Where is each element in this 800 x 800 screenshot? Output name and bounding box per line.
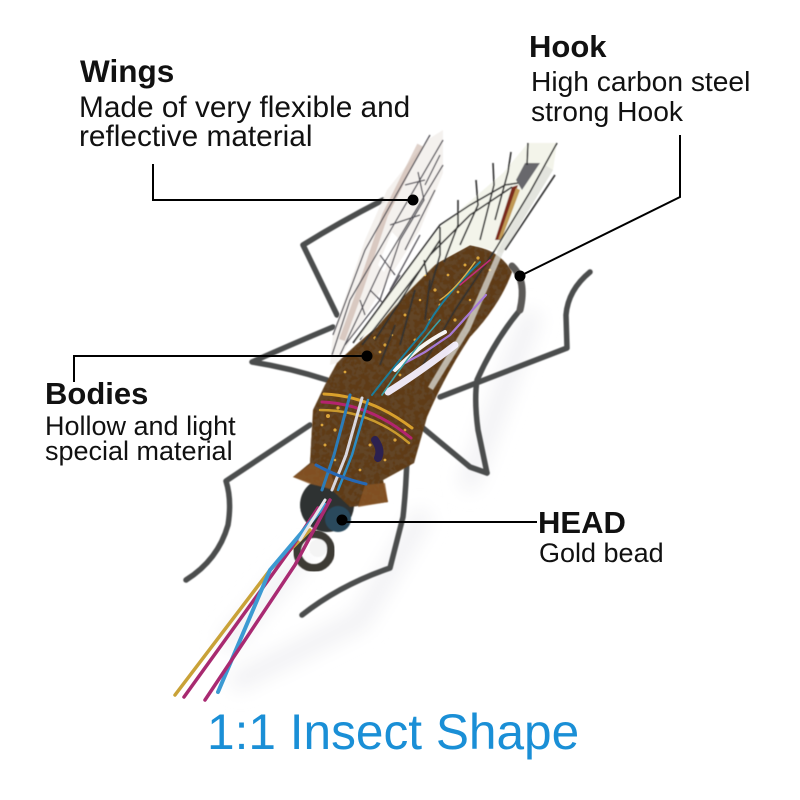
thread wraps bbox=[316, 394, 412, 490]
hook eye bbox=[297, 534, 331, 568]
wings description: reflective material bbox=[79, 120, 312, 153]
glitter specks bbox=[321, 256, 491, 471]
legs bbox=[186, 200, 590, 615]
bodies heading: Bodies bbox=[45, 376, 148, 411]
hook heading: Hook bbox=[529, 29, 607, 64]
bodies description: Hollow and light bbox=[45, 411, 236, 441]
bodies description: special material bbox=[45, 436, 233, 466]
callout: bodies bbox=[45, 350, 372, 466]
wings leader line bbox=[153, 164, 418, 206]
head description: Gold bead bbox=[539, 538, 664, 568]
head leader line bbox=[336, 514, 537, 526]
callout: wings bbox=[79, 53, 418, 206]
tail fibres bbox=[175, 500, 330, 700]
hook description: strong Hook bbox=[531, 95, 684, 127]
callout: hook bbox=[514, 29, 750, 282]
abdomen and thorax bbox=[293, 245, 512, 507]
head heading: HEAD bbox=[538, 505, 626, 540]
callout: head bbox=[336, 505, 664, 568]
head bead bbox=[300, 478, 354, 532]
wings heading: Wings bbox=[80, 53, 174, 89]
bodies leader line bbox=[74, 350, 372, 382]
right wing bbox=[353, 143, 557, 390]
title: 1:1 Insect Shape bbox=[207, 704, 579, 760]
insect illustration bbox=[175, 130, 590, 700]
hook description: High carbon steel bbox=[531, 65, 750, 97]
left wing bbox=[330, 130, 443, 365]
soft shadow under insect bbox=[230, 320, 530, 680]
iridescent flash on wing bbox=[372, 260, 490, 395]
hook leader line bbox=[514, 135, 680, 282]
wings description: Made of very flexible and bbox=[79, 91, 410, 124]
